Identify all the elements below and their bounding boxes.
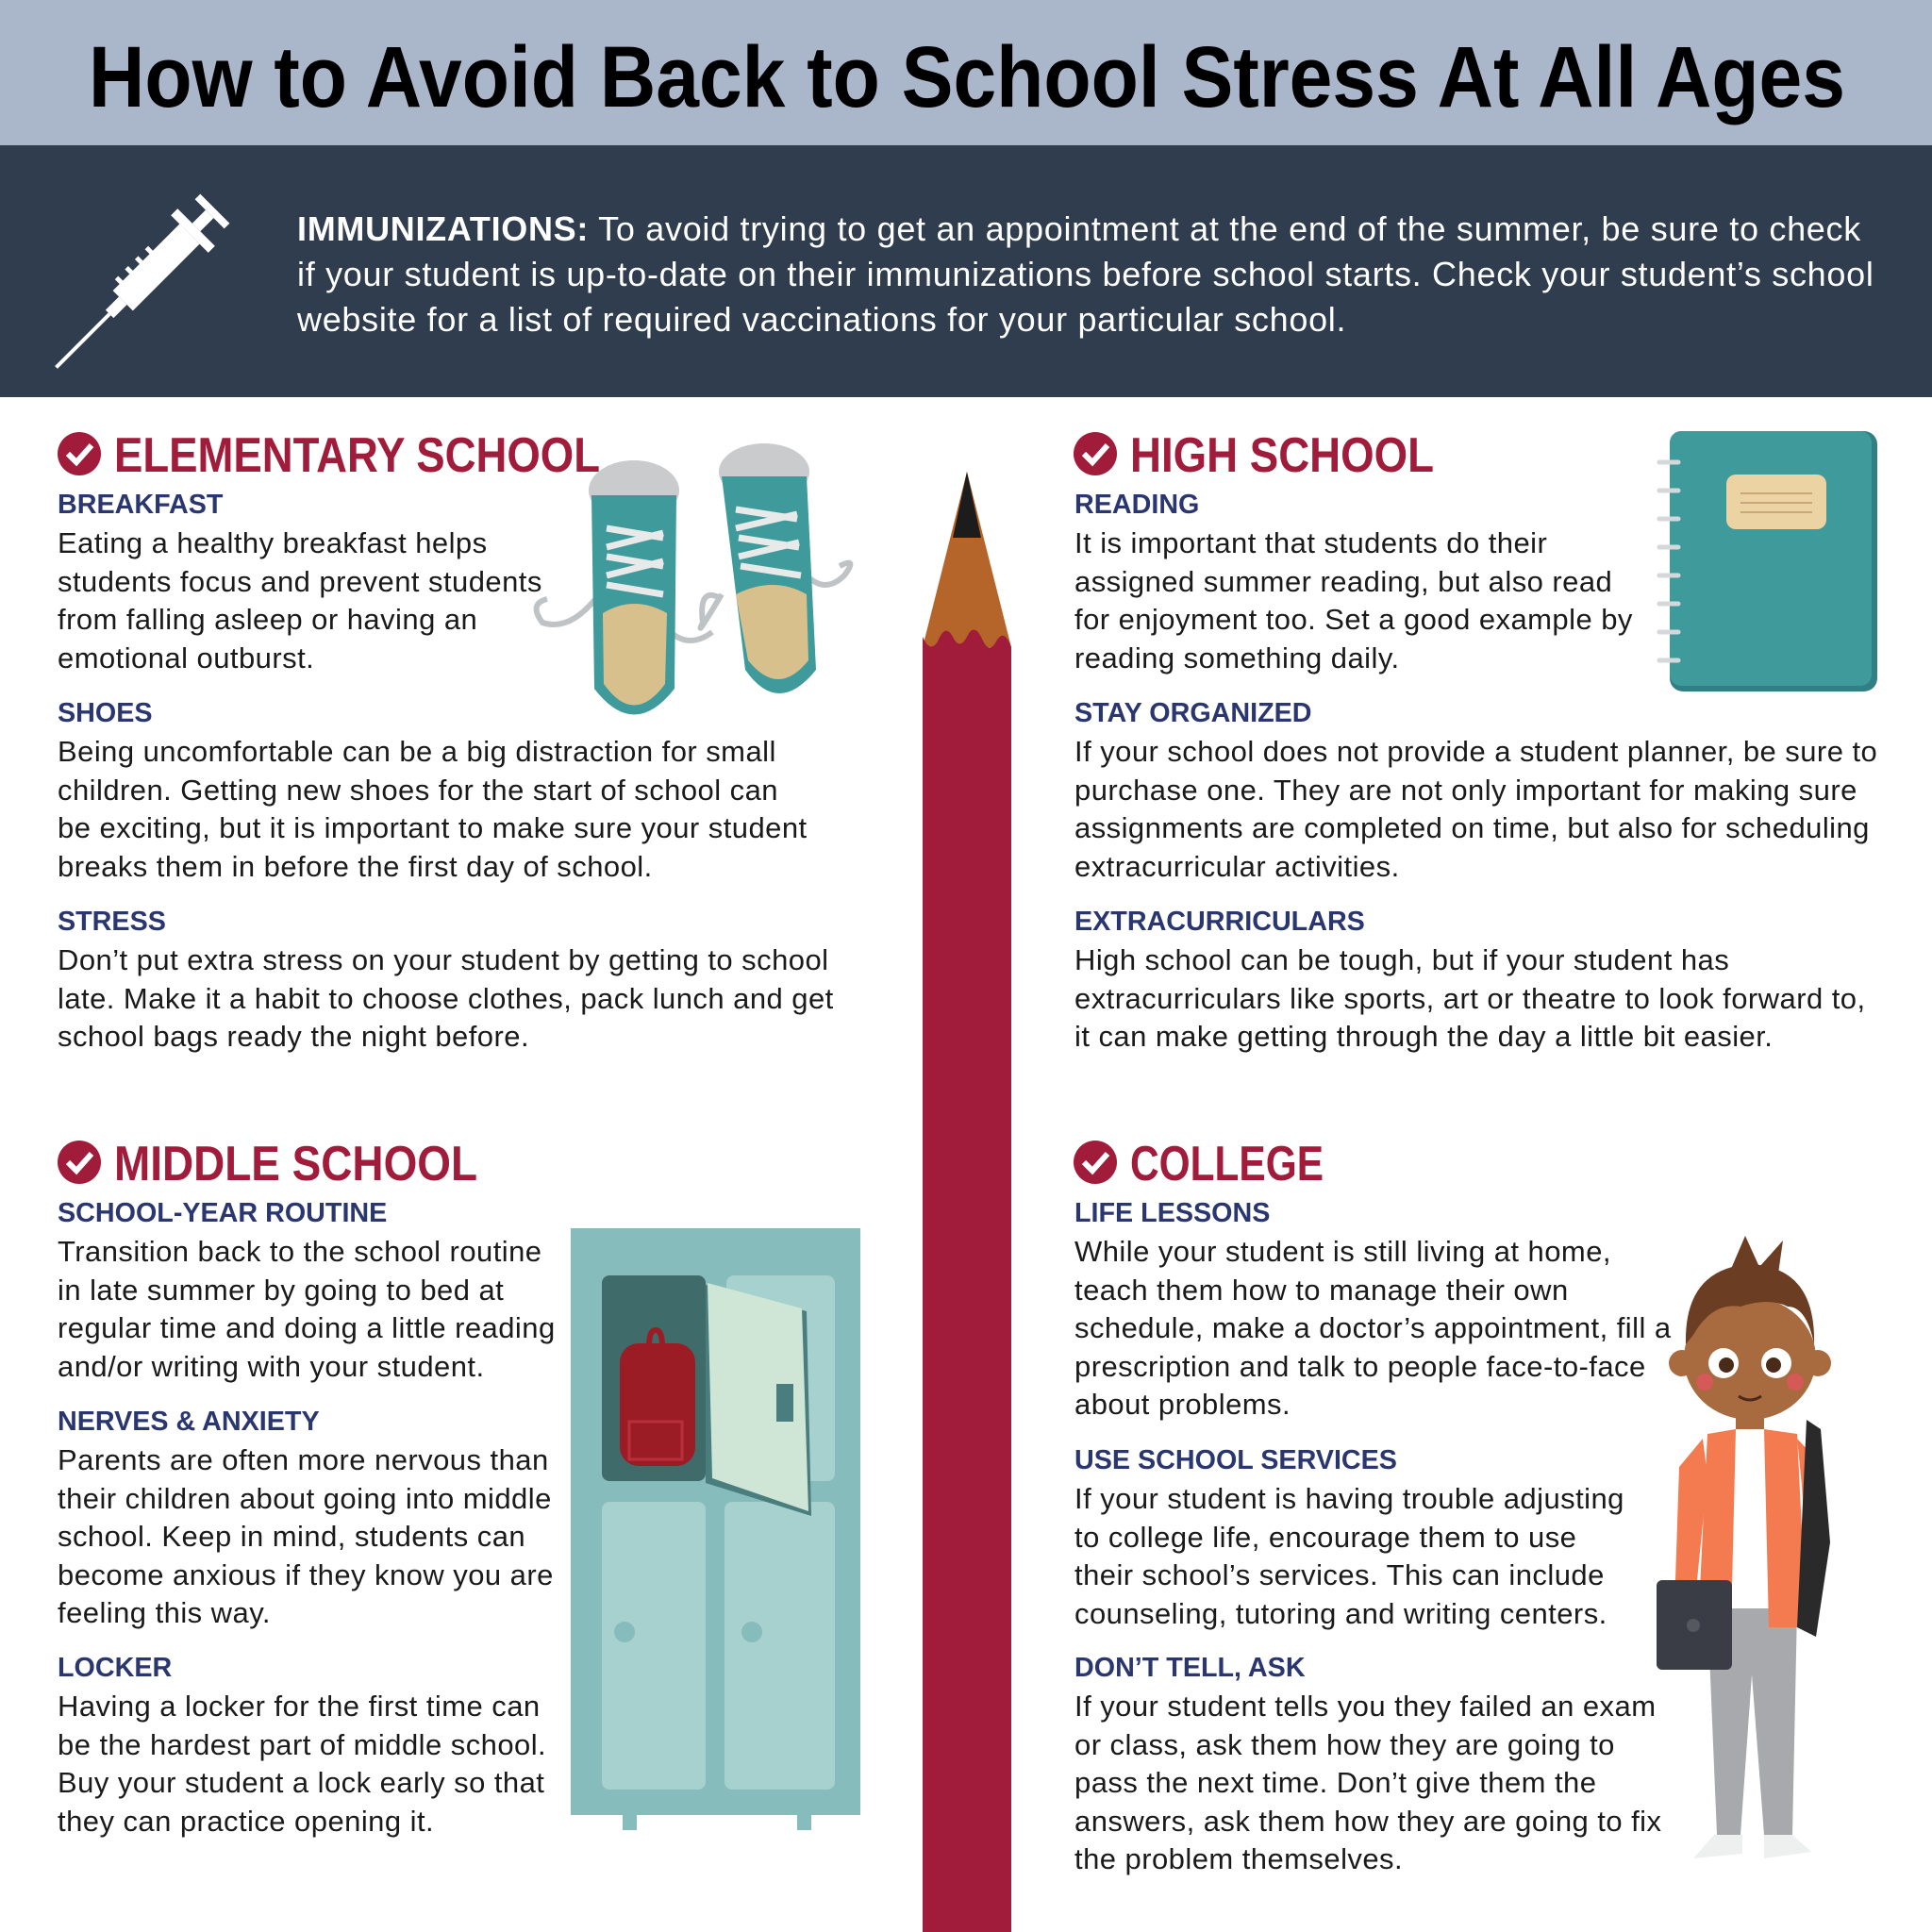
immunization text: IMMUNIZATIONS: To avoid trying to get an appointment at the end of the summer, be sure to check: [297, 209, 1861, 248]
text: stress: Don’t put extra stress on your student by getting to school: [58, 943, 828, 976]
heading: high school: HIGH SCHOOL: [1130, 428, 1434, 483]
text: routine: Transition back to the school routine: [58, 1235, 541, 1268]
icon: syringe: [55, 194, 230, 369]
text: locker: Buy your student a lock early so that: [58, 1766, 544, 1799]
text: stay organized: If your school does not provide a student planner, be sure to: [1074, 735, 1877, 768]
text: life lessons: prescription and talk to people face-to-face: [1074, 1349, 1646, 1383]
text: shoes: breaks them in before the first day of school.: [58, 849, 653, 883]
text: nerves: school. Keep in mind, students can: [58, 1520, 525, 1553]
text: locker: be the hardest part of middle school.: [58, 1728, 546, 1760]
immunization text: if your student is up-to-date on their immunizations before school starts. Check your student’s school: [297, 255, 1874, 293]
text: reading: [1074, 526, 1633, 674]
text: breakfast: Eating a healthy breakfast helps: [58, 526, 488, 559]
sub: locker: LOCKER: [58, 1653, 172, 1683]
immunization text: [297, 209, 1874, 339]
text: extracurriculars: extracurriculars like sports, art or theatre to look forward to,: [1074, 981, 1866, 1015]
text: don't tell ask: If your student tells you they failed an exam: [1074, 1690, 1656, 1723]
text: breakfast: emotional outburst.: [58, 641, 314, 674]
sub: stress: STRESS: [58, 907, 166, 937]
text: locker: Having a locker for the first time can: [58, 1690, 541, 1723]
text: stress: school bags ready the night before.: [58, 1020, 529, 1053]
text: life lessons: [1074, 1235, 1672, 1421]
text: shoes: be exciting, but it is important to make sure your student: [58, 811, 808, 844]
immunization band: [0, 145, 1932, 397]
text: don't tell ask: answers, ask them how they are going to fix: [1074, 1804, 1661, 1838]
text: school services: counseling, tutoring and writing centers.: [1074, 1596, 1607, 1630]
text: locker: [58, 1690, 546, 1838]
text: extracurriculars: [1074, 943, 1866, 1053]
sub: stay organized: STAY ORGANIZED: [1074, 698, 1312, 728]
text: routine: regular time and doing a little reading: [58, 1311, 556, 1344]
text: stay organized: extracurricular activities.: [1074, 849, 1400, 883]
text: locker: they can practice opening it.: [58, 1804, 434, 1838]
text: life lessons: teach them how to manage their own: [1074, 1274, 1569, 1306]
icon: notebook: [1657, 431, 1877, 691]
text: don't tell ask: the problem themselves.: [1074, 1842, 1403, 1875]
text: routine: [58, 1235, 556, 1383]
text: routine: and/or writing with your student.: [58, 1349, 485, 1383]
text: stay organized: assignments are completed on time, but also for scheduling: [1074, 811, 1870, 844]
sub: school services: USE SCHOOL SERVICES: [1074, 1445, 1397, 1475]
icon: locker: [571, 1228, 860, 1830]
text: stay organized: [1074, 735, 1877, 883]
text: don't tell ask: pass the next time. Don’t give them the: [1074, 1766, 1596, 1799]
icon: college student: [1657, 1236, 1831, 1858]
sub: life lessons: LIFE LESSONS: [1074, 1198, 1270, 1228]
text: school services: [1074, 1482, 1624, 1630]
text: nerves: their children about going into middle: [58, 1481, 552, 1515]
heading: college: COLLEGE: [1130, 1137, 1324, 1191]
text: stay organized: purchase one. They are not only important for making sure: [1074, 774, 1857, 806]
text: nerves: [58, 1443, 554, 1629]
text: breakfast: [58, 526, 542, 674]
text: school services: to college life, encourage them to use: [1074, 1521, 1576, 1553]
text: nerves: become anxious if they know you are: [58, 1558, 554, 1591]
heading: college: [1074, 1137, 1324, 1191]
text: reading: for enjoyment too. Set a good example by: [1074, 603, 1633, 636]
text: reading: It is important that students do their: [1074, 526, 1547, 559]
text: school services: their school’s services. This can include: [1074, 1558, 1605, 1591]
text: don't tell ask: or class, ask them how they are going to: [1074, 1728, 1615, 1760]
text: reading: assigned summer reading, but also read: [1074, 564, 1612, 598]
text: breakfast: students focus and prevent students: [58, 564, 542, 598]
text: stress: [58, 943, 834, 1053]
text: nerves: feeling this way.: [58, 1596, 271, 1629]
text: extracurriculars: it can make getting through the day a little bit easier.: [1074, 1020, 1773, 1053]
sub: breakfast: BREAKFAST: [58, 490, 223, 520]
text: extracurriculars: High school can be tough, but if your student has: [1074, 943, 1729, 976]
sub: shoes: SHOES: [58, 698, 153, 728]
text: nerves: Parents are often more nervous than: [58, 1443, 549, 1476]
icon: sneakers: [534, 443, 853, 715]
text: life lessons: schedule, make a doctor’s appointment, fill a: [1074, 1311, 1672, 1344]
text: life lessons: While your student is still living at home,: [1074, 1235, 1611, 1268]
text: stress: late. Make it a habit to choose clothes, pack lunch and get: [58, 981, 834, 1015]
text: shoes: Being uncomfortable can be a big distraction for small: [58, 735, 776, 768]
sub: extracurriculars: EXTRACURRICULARS: [1074, 907, 1365, 937]
sub: routine: SCHOOL-YEAR ROUTINE: [58, 1198, 387, 1228]
text: shoes: children. Getting new shoes for the start of school can: [58, 774, 778, 806]
text: routine: in late summer by going to bed at: [58, 1274, 504, 1306]
title band: [0, 0, 1932, 145]
text: life lessons: about problems.: [1074, 1388, 1291, 1421]
heading: middle school: MIDDLE SCHOOL: [114, 1137, 477, 1191]
immunization text: website for a list of required vaccinations for your particular school.: [297, 300, 1346, 339]
text: shoes: [58, 735, 808, 883]
text: breakfast: from falling asleep or having an: [58, 603, 477, 636]
pencil: [923, 472, 1011, 1932]
sub: reading: READING: [1074, 490, 1199, 520]
text: reading: reading something daily.: [1074, 641, 1400, 674]
text: don't tell ask: [1074, 1690, 1661, 1875]
text: school services: If your student is having trouble adjusting: [1074, 1482, 1624, 1515]
sub: nerves: NERVES & ANXIETY: [58, 1407, 320, 1437]
sub: don't tell ask: DON’T TELL, ASK: [1074, 1653, 1306, 1683]
